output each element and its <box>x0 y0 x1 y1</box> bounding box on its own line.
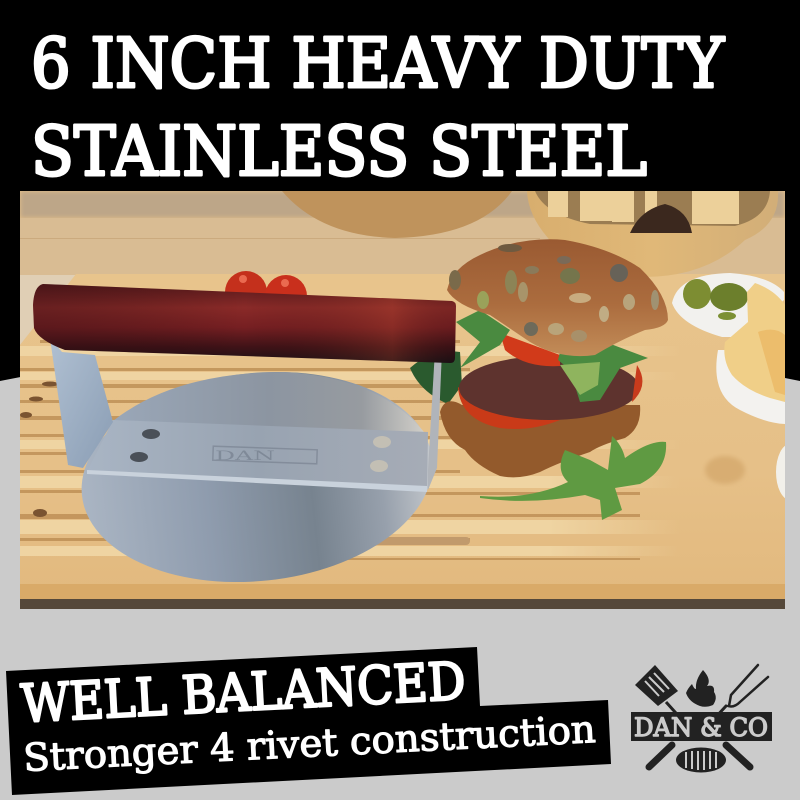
fries dish <box>716 283 785 424</box>
photo backdrop: wall and table <box>20 191 785 345</box>
icon: grill <box>676 748 726 772</box>
upper tomato <box>500 333 560 366</box>
black header background with curved lower edge <box>0 0 800 381</box>
banner heading: WELL BALANCED <box>20 652 467 735</box>
title: 6 INCH HEAVY DUTY <box>31 25 725 104</box>
banner black shape <box>6 647 611 795</box>
riveted bracket bar <box>106 420 428 486</box>
lower tomato <box>458 387 560 429</box>
title <box>31 25 725 192</box>
tomatoes behind handle <box>225 271 307 295</box>
icon: meat fork <box>649 665 768 767</box>
greens <box>456 310 648 402</box>
title: STAINLESS STEEL <box>31 113 647 192</box>
burger <box>410 239 668 520</box>
bun seeds <box>449 244 659 342</box>
white cup at right edge <box>776 446 785 498</box>
right upright <box>428 362 442 490</box>
banner subheading: Stronger 4 rivet construction <box>22 707 597 780</box>
wooden handle <box>33 284 456 363</box>
rivets <box>130 429 391 472</box>
logo band <box>631 712 772 741</box>
bamboo bowl with dark food <box>527 191 778 277</box>
cutting board <box>20 274 790 609</box>
engraved logo <box>213 446 317 464</box>
product photo <box>20 191 800 609</box>
icon: spatula <box>635 665 750 767</box>
burger press <box>33 284 456 599</box>
banner: well balanced <box>6 647 611 795</box>
left upright <box>50 338 113 468</box>
bottom bun <box>440 401 640 477</box>
patty <box>459 356 639 420</box>
leaf behind burger <box>410 351 462 404</box>
olive dish <box>672 273 784 337</box>
engraved logo: DAN <box>215 449 275 464</box>
background wooden bowl left <box>282 191 512 238</box>
top bun <box>447 239 668 356</box>
icon: flame <box>686 670 716 707</box>
arugula on board <box>480 436 666 520</box>
logo text: DAN & CO <box>634 713 768 742</box>
logo: Dan & Co <box>631 665 772 772</box>
round stainless plate <box>82 372 430 582</box>
